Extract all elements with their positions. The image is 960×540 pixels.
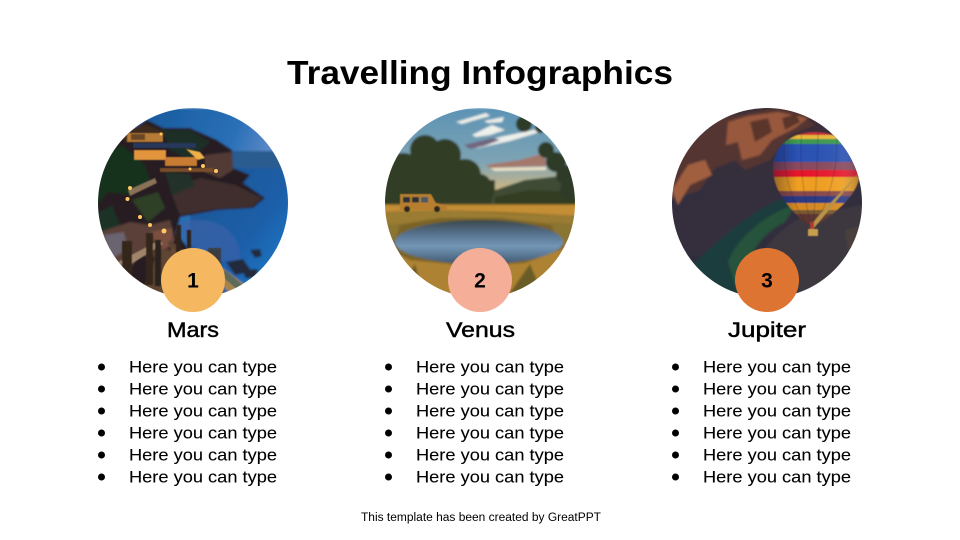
- bullet list: Venus: [385, 358, 564, 486]
- bullet list: Mars: Here you can type: [129, 402, 277, 420]
- heading: Jupiter: Jupiter: [728, 319, 806, 342]
- bullet list: Venus: Here you can type: [416, 446, 564, 464]
- badge: 2: [448, 248, 512, 312]
- bullet list: Jupiter: Here you can type: [703, 446, 851, 464]
- bullet list: Mars: Here you can type: [129, 424, 277, 442]
- badge: 2: 2: [474, 270, 486, 292]
- photo: safari truck by a pond: [380, 108, 580, 300]
- badge: 3: 3: [761, 270, 773, 292]
- bullet list: Jupiter: Here you can type: [703, 402, 851, 420]
- bullet list: Jupiter: Here you can type: [703, 468, 851, 486]
- bullet list: Mars: Here you can type: [129, 468, 277, 486]
- bullet list: Mars: Here you can type: [129, 358, 277, 376]
- badge: 3: [735, 248, 799, 312]
- bullet list: Venus: Here you can type: [416, 380, 564, 398]
- panel: Jupiter: [670, 106, 868, 486]
- icon: hot air balloon: [770, 130, 862, 236]
- bullet list: Mars: Here you can type: [129, 380, 277, 398]
- bullet list: Venus: Here you can type: [416, 468, 564, 486]
- footer credit: This template has been created by GreatPPT: [361, 512, 601, 524]
- bullet list: Venus: Here you can type: [416, 358, 564, 376]
- bullet list: Venus: Here you can type: [416, 424, 564, 442]
- bullet list: Jupiter: Here you can type: [703, 424, 851, 442]
- bullet list: Mars: [98, 358, 277, 486]
- bullet list: Jupiter: Here you can type: [703, 358, 851, 376]
- bullet list: Jupiter: Here you can type: [703, 380, 851, 398]
- bullet list: Jupiter: [672, 358, 851, 486]
- icon: safari truck: [400, 194, 447, 212]
- badge: 1: [161, 248, 225, 312]
- bullet list: Mars: Here you can type: [129, 446, 277, 464]
- badge: 1: 1: [187, 270, 199, 292]
- heading: Venus: Venus: [446, 319, 515, 342]
- panel: Venus: [380, 108, 580, 486]
- title: Travelling Infographics: [287, 54, 673, 91]
- photo: coastal resort at night: [90, 108, 290, 300]
- photo: hot air balloon over a canyon: [670, 106, 868, 300]
- heading: Mars: Mars: [167, 319, 219, 342]
- panel: Mars: [90, 108, 290, 486]
- bullet list: Venus: Here you can type: [416, 402, 564, 420]
